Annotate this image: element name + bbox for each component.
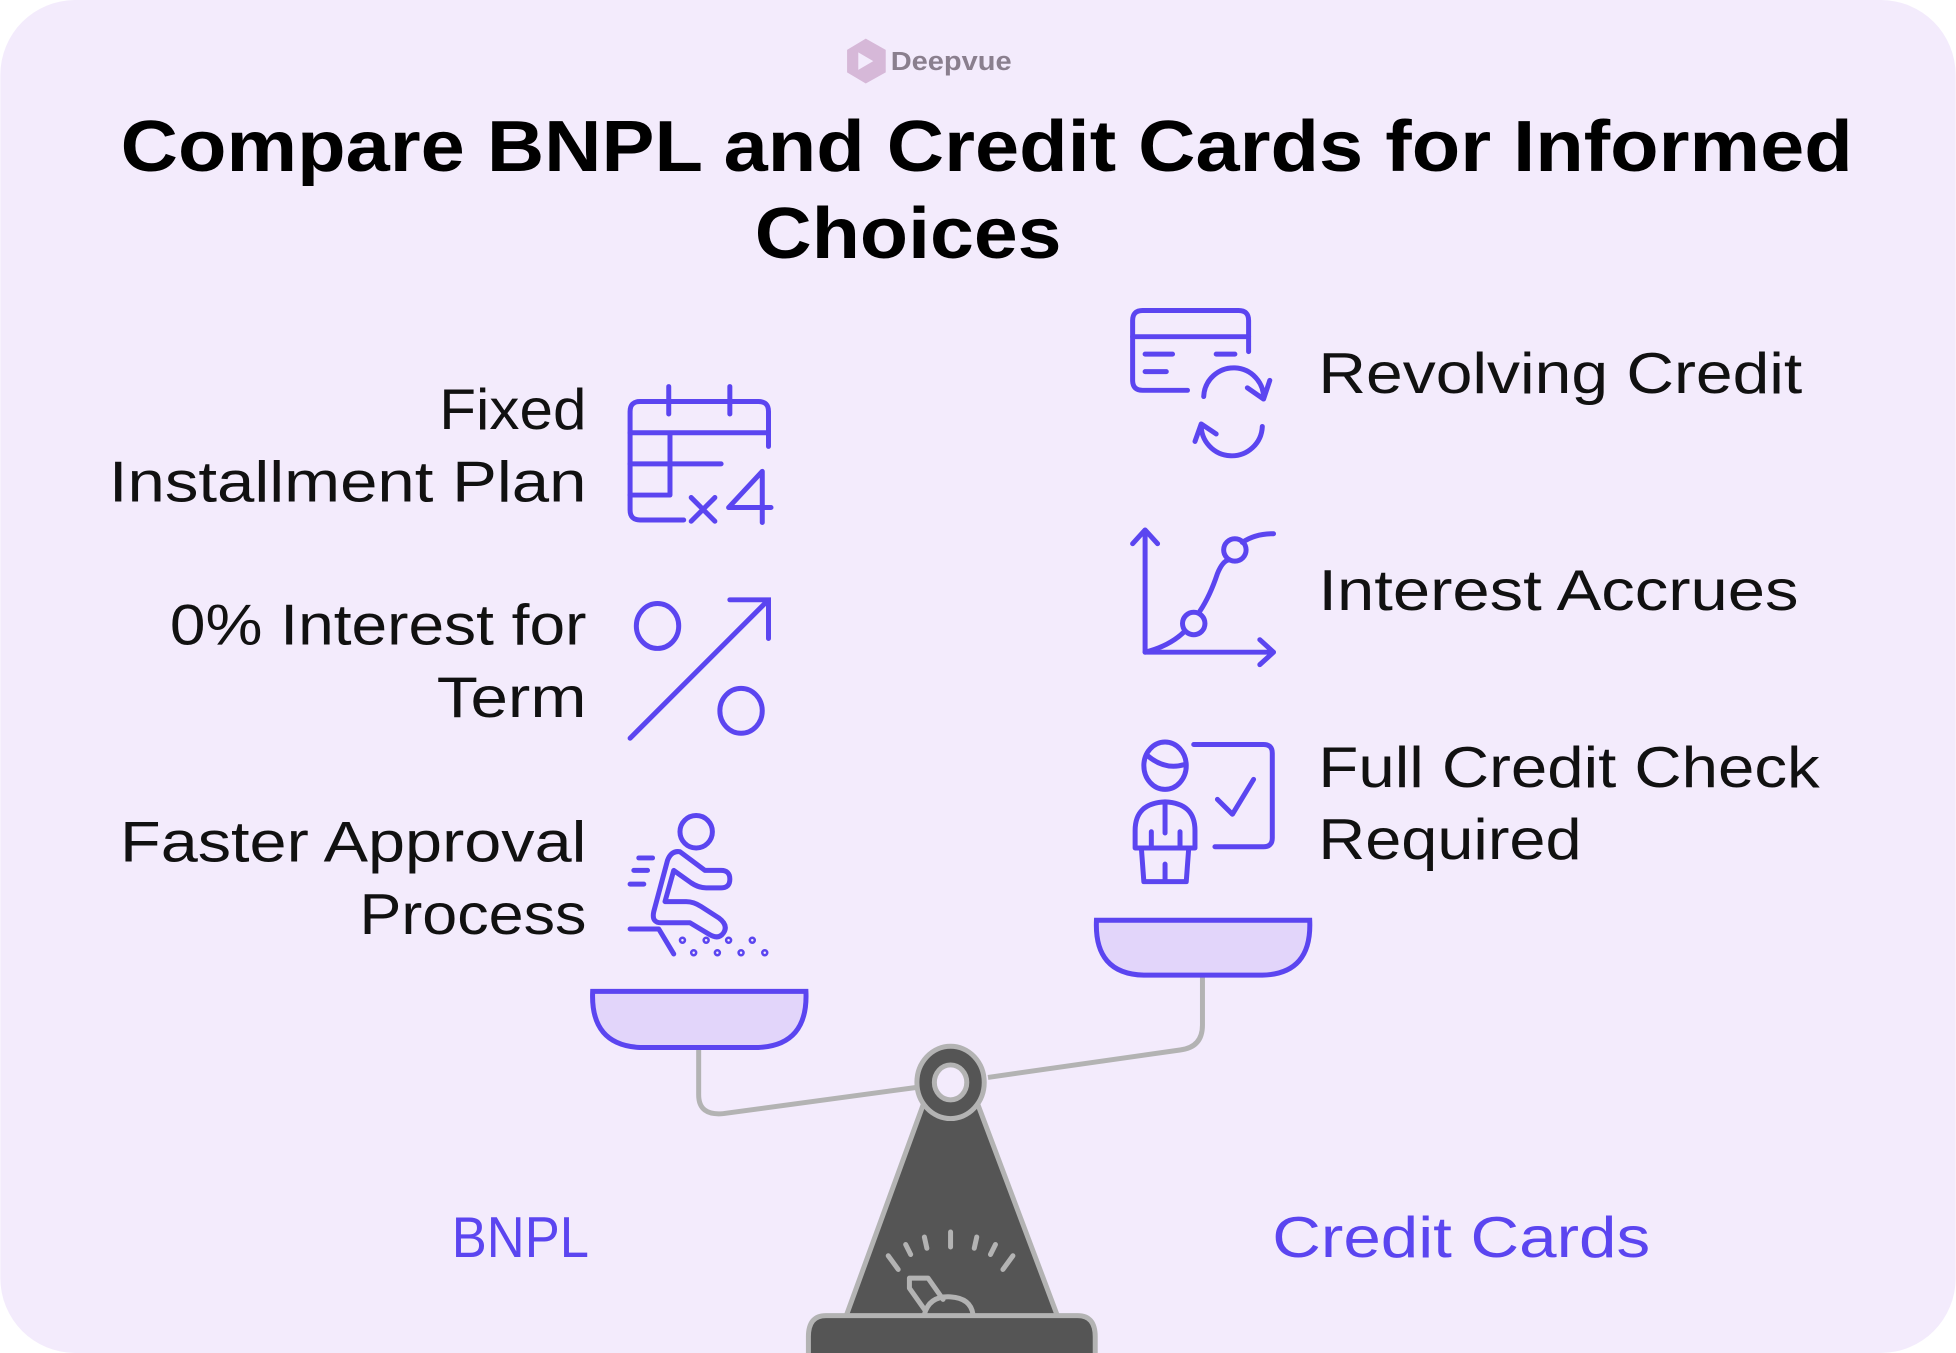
icon: card refresh [1133,311,1270,456]
scale stand [808,1046,1095,1353]
text: fixed installment plan: Fixed [439,378,586,442]
right pan [1096,920,1310,975]
text: full credit check: Full Credit Check [1318,736,1820,800]
icon: calendar x4 [630,387,771,522]
icon: percent [630,600,769,738]
icon: graph [1133,530,1274,665]
logo [847,39,1012,84]
title: Choices [755,194,1062,274]
label: BNPL: BNPL [452,1206,589,1270]
label: Credit Cards: Credit Cards [1272,1206,1650,1270]
text: 0% interest: Term [437,666,586,730]
title: Compare BNPL and Credit Cards for Informed [121,107,1853,187]
text: revolving credit: Revolving Credit [1318,342,1802,406]
text: 0% interest: 0% Interest for [170,594,586,658]
text: full credit check: Required [1318,808,1582,872]
text: fixed installment plan: Installment Plan [109,450,586,514]
text: faster approval: Process [359,883,586,947]
title [121,107,1853,274]
scale beam [699,975,1202,1114]
logo: Deepvue [891,46,1012,76]
text: faster approval: Faster Approval [120,811,586,875]
text: faster approval [120,811,586,947]
text: full credit check [1318,736,1820,872]
text: 0% interest [170,594,586,730]
text: fixed installment plan [109,378,586,514]
left pan [593,991,806,1047]
icon: runner [630,816,730,954]
icon: person check [1135,742,1272,882]
text: interest accrues: Interest Accrues [1318,559,1799,623]
